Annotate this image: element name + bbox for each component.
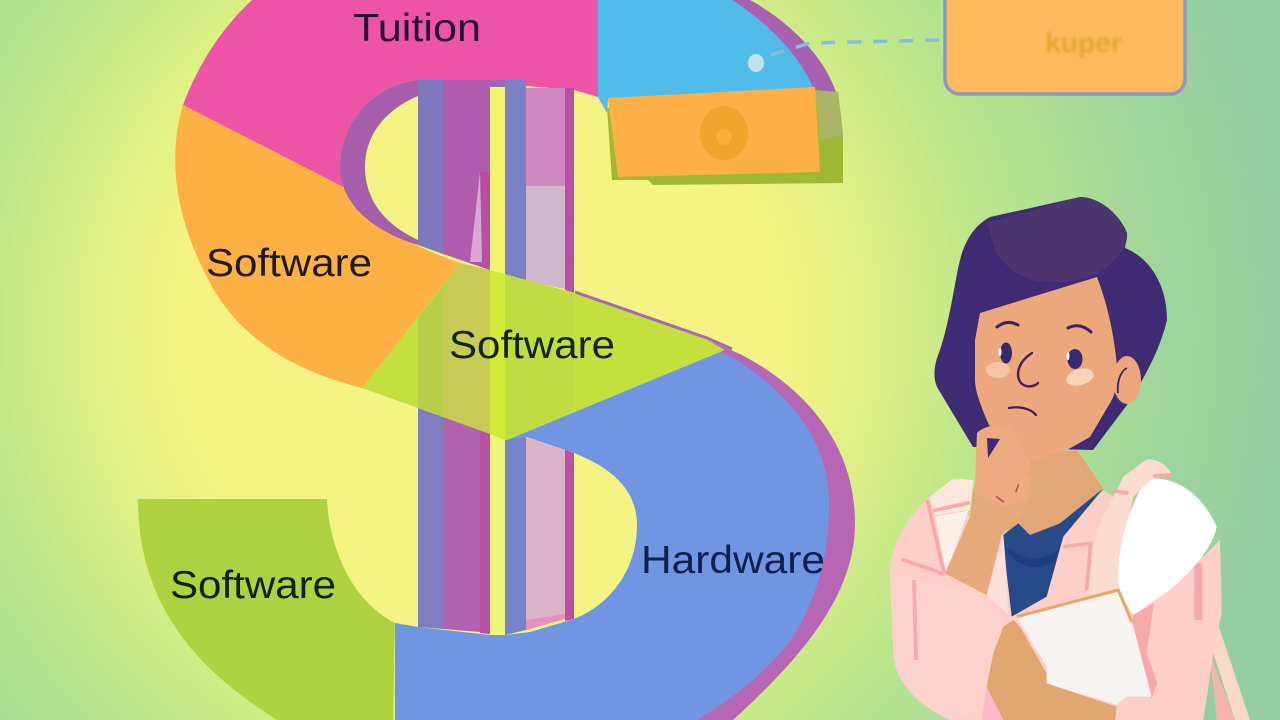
lower hand [987, 620, 1117, 720]
seam [1063, 543, 1091, 590]
jacket [890, 490, 1222, 720]
stripe [443, 80, 490, 270]
tee fold [1007, 547, 1058, 567]
stripe [418, 408, 443, 629]
right eye [1068, 349, 1082, 369]
segment: tuition pink [183, 0, 598, 187]
stripe [505, 437, 526, 635]
stripe [418, 80, 443, 254]
stripe [565, 88, 574, 293]
label: Hardware: Hardware [641, 539, 825, 582]
green stripe overlays [418, 263, 574, 440]
overlay [490, 270, 505, 440]
icon: banknote [608, 87, 820, 177]
dashed line [771, 40, 940, 55]
white shoulder [1118, 478, 1217, 615]
sleeve seam [914, 580, 916, 660]
right brow [1068, 326, 1091, 332]
seam [1186, 563, 1210, 620]
label: Software centre: Software [449, 324, 615, 367]
segment: bottom software green [138, 499, 395, 720]
ear line [1118, 368, 1127, 393]
stripe [490, 434, 505, 635]
seam [927, 500, 944, 573]
connector dot [748, 54, 764, 72]
bill seal centre [716, 129, 732, 145]
segment: top left software orange [175, 105, 460, 388]
segment: sky blue [598, 0, 815, 113]
overlay [505, 274, 574, 440]
ear [1113, 356, 1141, 404]
left collar lower [935, 511, 968, 573]
left cheek [986, 362, 1010, 378]
band shading [815, 90, 843, 140]
upper vertical stripes [418, 80, 574, 293]
tablet top edge [1017, 590, 1132, 622]
label: Software bottom: Software [170, 564, 336, 607]
stripe [480, 430, 490, 634]
bill seal [700, 106, 748, 160]
stripe [490, 80, 505, 87]
seam [902, 559, 944, 574]
stripe [526, 186, 565, 289]
shoulder strap [1087, 459, 1172, 597]
sleeve [890, 573, 1003, 720]
left brow [997, 322, 1018, 327]
tablet shadow [1127, 603, 1157, 698]
stripe [526, 88, 565, 186]
left collar [930, 478, 973, 515]
nose [1018, 353, 1038, 386]
chest left [987, 535, 1008, 615]
segment: hardware blue [395, 347, 829, 720]
green band under banknote [607, 90, 843, 185]
fist highlight [975, 453, 1030, 507]
lower pink patch [982, 687, 1003, 720]
segment: right purple band [575, 292, 855, 720]
bill body [608, 87, 820, 177]
blurred box text: kuper [1045, 27, 1122, 58]
stripe [505, 80, 526, 281]
student character [890, 197, 1250, 720]
backpack strap back [1213, 620, 1250, 720]
stripe [490, 87, 505, 274]
hand fingers over hair [975, 426, 1032, 490]
hair top highlight [987, 197, 1127, 282]
facial features [997, 322, 1091, 415]
top right purple band [732, 0, 836, 92]
tee shirt [1003, 488, 1103, 617]
knuckles [997, 468, 1018, 502]
tablet [1017, 590, 1152, 705]
stripe [565, 450, 574, 621]
lower vertical stripes [418, 408, 574, 635]
seam [933, 503, 970, 511]
seam [914, 580, 916, 660]
right cheek [1064, 366, 1096, 388]
label: Software left: Software [206, 242, 372, 285]
stripe highlight [470, 172, 482, 262]
callout box [945, 0, 1185, 94]
strap shadow [1210, 653, 1235, 720]
label: Tuition: Tuition [353, 7, 481, 50]
overlay [418, 286, 443, 417]
segment: centre software green [362, 263, 725, 440]
seam [1113, 491, 1128, 493]
callout connector [748, 40, 940, 72]
stripe [443, 417, 480, 632]
overlay [443, 263, 490, 434]
face [975, 277, 1117, 463]
neck [1004, 450, 1103, 546]
hair back [934, 197, 1167, 450]
box [945, 0, 1185, 94]
stripe [526, 614, 565, 630]
right eye highlight [1066, 352, 1070, 360]
seam [1153, 475, 1172, 476]
jacket seams [902, 475, 1198, 660]
raised arm and hand [945, 453, 1033, 595]
thin purple edge [575, 292, 732, 349]
left eye [1000, 342, 1012, 364]
crescent band [340, 80, 418, 245]
body in zoomed coordinates [890, 453, 1250, 720]
mouth [1009, 407, 1036, 415]
left eye highlight [998, 348, 1002, 356]
stripe [470, 172, 490, 270]
stripe [526, 437, 565, 630]
finger shadow [987, 438, 1000, 458]
dollar sign chart [138, 0, 940, 720]
